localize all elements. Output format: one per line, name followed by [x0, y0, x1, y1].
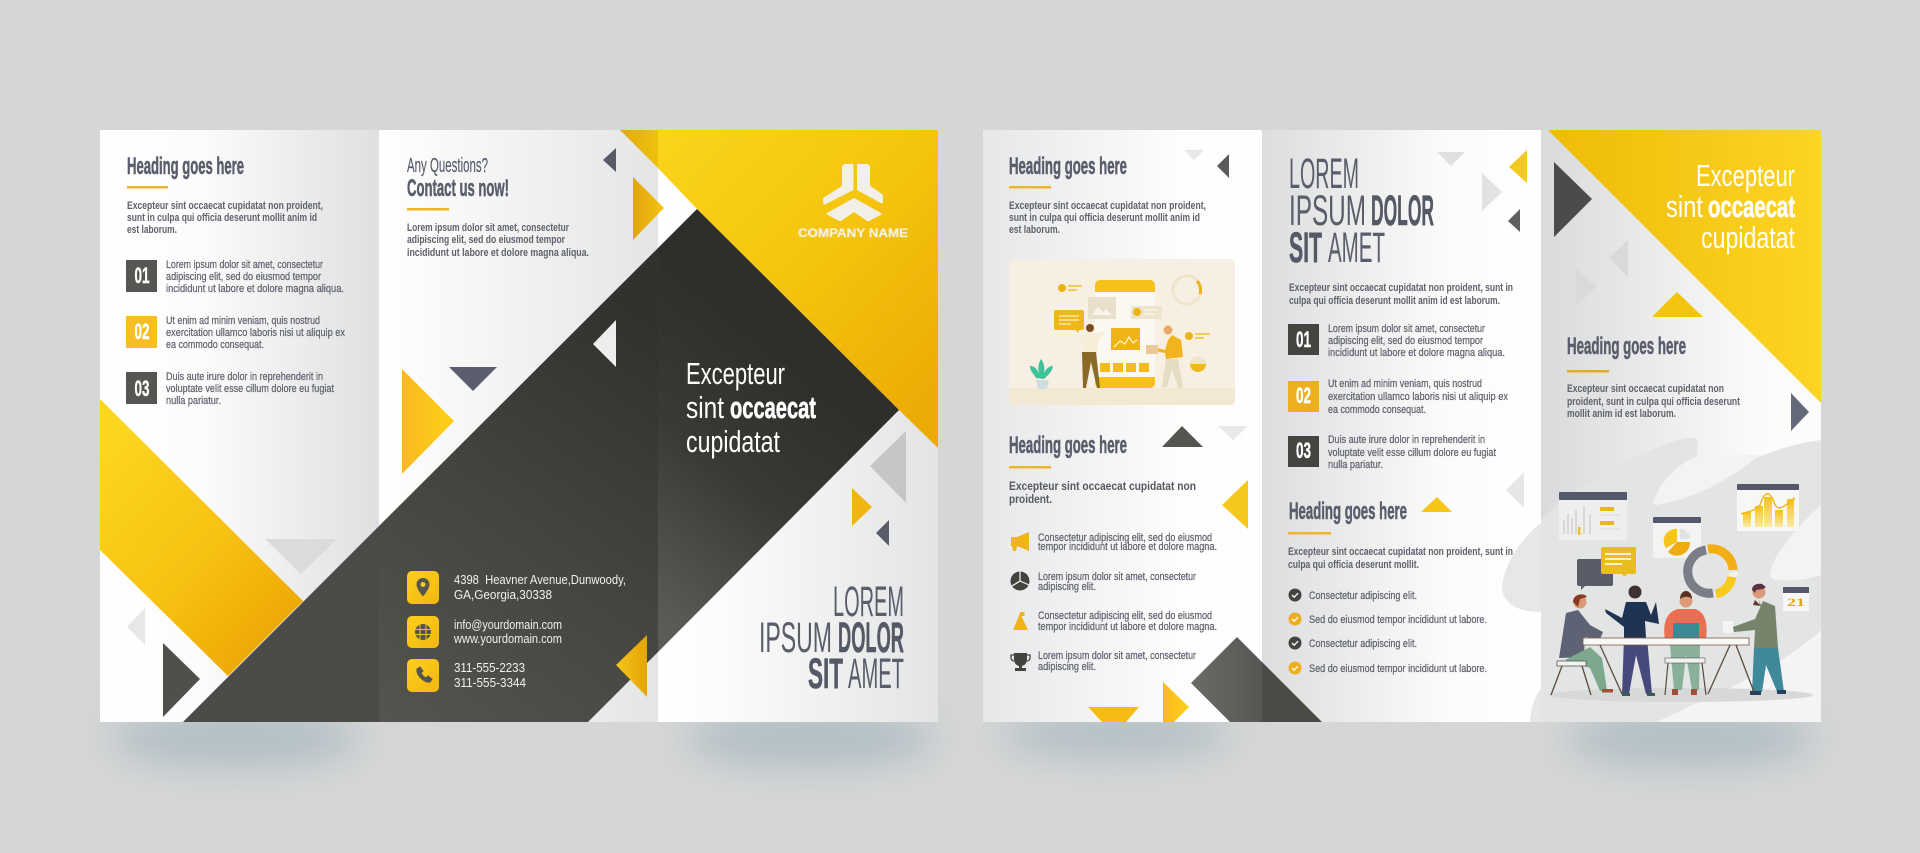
contact heading — [407, 155, 509, 202]
phone row — [407, 659, 526, 692]
triangle dark left — [1217, 154, 1229, 178]
triangle dark right — [1554, 162, 1592, 237]
triangle dark left — [1508, 209, 1520, 232]
list item 03: 03 — [134, 376, 150, 401]
triangle yellow lower — [616, 635, 647, 697]
table — [1583, 638, 1754, 694]
tagline: cupidatat — [1701, 220, 1795, 255]
triangle yellow left — [1509, 150, 1527, 183]
phone row: 311-555-2233 — [454, 661, 525, 675]
icon row: trophy: Lorem ipsum dolor sit amet, consectetur — [1038, 650, 1196, 662]
heading rule — [1567, 370, 1609, 372]
donut chart — [1688, 549, 1733, 594]
list item 01 — [1288, 323, 1505, 359]
icon row: pie chart: Lorem ipsum dolor sit amet, consectetur — [1038, 571, 1196, 583]
list item 01: adipiscing elit, sed do eiusmod tempor — [1328, 335, 1483, 347]
list item 03: voluptate velit esse cillum dolore eu fugiat — [166, 383, 334, 395]
triangle light down — [1218, 426, 1248, 440]
address row: 4398 Heavner Avenue,Dunwoody, — [454, 573, 626, 587]
check list: Consectetur adipiscing elit. — [1309, 590, 1417, 602]
web row — [407, 616, 562, 648]
brochure mockup spread — [100, 130, 1821, 780]
check list — [1288, 588, 1487, 675]
list item 03: voluptate velit esse cillum dolore eu fugiat — [1328, 447, 1496, 459]
heading 2: Heading goes here — [1009, 432, 1127, 459]
paragraph: Excepteur sint occaecat cupidatat non proident, sunt in — [1288, 546, 1513, 558]
company name: COMPANY NAME — [798, 226, 908, 240]
icon row: megaphone: tempor incididunt ut labore et dolore magna. — [1038, 541, 1217, 553]
triangle light left — [1506, 472, 1524, 508]
triangle yellow down — [1088, 707, 1139, 722]
cover tagline: occaecat — [730, 390, 816, 425]
intro paragraph — [127, 200, 323, 236]
intro paragraph: est laborum. — [127, 224, 177, 236]
address row — [407, 571, 626, 604]
heading: Heading goes here — [1289, 498, 1407, 525]
brochure shadows — [110, 708, 1815, 768]
triangle yellow — [852, 488, 872, 526]
list item 02: 02 — [134, 319, 150, 344]
light triangle left — [127, 608, 145, 645]
cover tagline: Excepteur — [686, 356, 785, 391]
paragraph: sunt in culpa qui officia deserunt mollit anim id — [1009, 212, 1200, 224]
icon row: pie chart — [1010, 571, 1196, 593]
grey triangle down — [265, 539, 337, 574]
contact paragraph: adipiscing elit, sed do eiusmod tempor — [407, 234, 566, 246]
heading rule — [127, 186, 168, 188]
list item 03: 03 — [1296, 438, 1311, 463]
triangle slate down — [449, 367, 497, 391]
contact heading: Any Questions? — [407, 155, 488, 177]
panel: contact fold — [379, 130, 664, 722]
triangle dark up — [1162, 426, 1203, 447]
phone row: 311-555-3344 — [454, 676, 526, 690]
web row: info@yourdomain.com — [454, 618, 562, 632]
dark diagonal shape — [379, 248, 658, 722]
triangle yellow up — [1652, 292, 1703, 317]
list item 01: adipiscing elit, sed do eiusmod tempor — [166, 271, 321, 283]
contact paragraph — [407, 222, 589, 259]
triangle slate right — [1791, 393, 1809, 431]
paragraph: mollit anim id est laborum. — [1567, 408, 1676, 420]
check list: Consectetur adipiscing elit. — [1309, 638, 1417, 650]
paragraph: Excepteur sint occaecat cupidatat non proident, sunt in — [1289, 282, 1513, 294]
yellow corner — [1548, 130, 1821, 403]
dark diagonal part — [183, 526, 379, 722]
list item 02: Ut enim ad minim veniam, quis nostrud — [1328, 378, 1482, 390]
panel: front cover: LOREM — [833, 578, 904, 626]
dark triangle right — [163, 643, 200, 717]
tagline — [1666, 158, 1795, 255]
list item 03: nulla pariatur. — [1328, 459, 1383, 471]
calendar — [1783, 587, 1809, 611]
list item 03 — [1288, 434, 1496, 471]
triangle light down — [1437, 152, 1465, 166]
logo — [823, 164, 883, 221]
triangle slate left — [603, 148, 616, 172]
heading: Heading goes here — [127, 153, 244, 180]
icon row: goal flag: tempor incididunt ut labore et dolore magna. — [1038, 621, 1217, 633]
paragraph — [1289, 282, 1513, 307]
illustration: mobile app team — [1009, 259, 1235, 405]
intro paragraph: sunt in culpa qui officia deserunt mollit anim id — [127, 212, 317, 224]
check list: Sed do eiusmod tempor incididunt ut labore. — [1309, 614, 1487, 626]
icon row: megaphone: Consectetur adipiscing elit, sed do eiusmod — [1038, 532, 1212, 544]
panel: front cover: AMET — [848, 650, 904, 698]
triangle light left — [1609, 240, 1628, 277]
person standing back — [1605, 586, 1659, 696]
paragraph: culpa qui officia deserunt mollit. — [1288, 559, 1419, 571]
contact heading: Contact us now! — [407, 175, 509, 202]
calendar: 21 — [1787, 595, 1805, 609]
paragraph: Excepteur sint occaecat cupidatat non — [1567, 383, 1724, 395]
triangle light right — [1576, 268, 1596, 305]
heading: Heading goes here — [1009, 153, 1127, 180]
triangle light down — [1184, 150, 1204, 160]
grey blob edge — [1502, 523, 1541, 722]
contact paragraph: incididunt ut labore et dolore magna aliqua. — [407, 247, 589, 259]
intro paragraph: Excepteur sint occaecat cupidatat non proident, — [127, 200, 323, 212]
person seated middle — [1664, 591, 1707, 695]
cover title: SIT — [808, 650, 843, 698]
list item 01: incididunt ut labore et dolore magna aliqua. — [166, 283, 344, 295]
cover title — [759, 578, 904, 698]
triangle yellow left — [1222, 480, 1248, 529]
check list: Sed do eiusmod tempor incididunt ut labore. — [1309, 663, 1487, 675]
list item 03: Duis aute irure dolor in reprehenderit in — [166, 371, 323, 383]
panel: left back fold — [100, 130, 379, 722]
brochure: outside spread — [100, 130, 938, 722]
title: LOREM — [1289, 150, 1359, 198]
list item 02: ea commodo consequat. — [1328, 404, 1426, 416]
triangle yellow (over fold) — [658, 202, 664, 214]
triangle grey — [870, 431, 906, 503]
list item 01: 01 — [1296, 327, 1311, 352]
icon row: goal flag: Consectetur adipiscing elit, sed do eiusmod — [1038, 610, 1212, 622]
grey diamond — [1191, 637, 1262, 722]
heading rule — [1009, 186, 1051, 188]
tagline: occaecat — [1708, 189, 1795, 224]
triangle yellow right — [1163, 682, 1189, 722]
panel: inside middle — [1262, 130, 1541, 722]
list item 02: exercitation ullamco laboris nisi ut aliquip ex — [1328, 391, 1508, 403]
icon row: trophy — [1011, 650, 1196, 673]
tagline: sint — [1666, 189, 1703, 224]
panel: inside right — [1541, 130, 1821, 722]
paragraph — [1567, 383, 1740, 420]
illustration: team meeting — [1551, 484, 1809, 696]
title: SIT — [1289, 224, 1322, 272]
paragraph 2: proident. — [1009, 492, 1052, 506]
triangle yellow right — [633, 177, 664, 240]
yellow corner — [620, 130, 658, 168]
background blob — [1541, 438, 1821, 722]
dark diamond — [658, 209, 899, 652]
heading rule — [1009, 466, 1051, 468]
list item 02: 02 — [1296, 383, 1311, 408]
chat bubble grey — [1577, 559, 1613, 590]
list item 01: Lorem ipsum dolor sit amet, consectetur — [166, 259, 323, 271]
yellow corner shape — [658, 130, 938, 448]
heading rule — [1288, 532, 1331, 534]
yellow diagonal band — [100, 399, 303, 676]
panel: front cover — [658, 130, 938, 722]
panel: front cover: DOLOR — [838, 614, 904, 662]
web row: www.yourdomain.com — [453, 632, 562, 646]
dark diamond right part — [1262, 662, 1322, 722]
address row: GA,Georgia,30338 — [454, 588, 552, 602]
paragraph 2 — [1009, 479, 1196, 506]
title: AMET — [1328, 224, 1385, 272]
list item 02: ea commodo consequat. — [166, 339, 264, 351]
paragraph 2: Excepteur sint occaecat cupidatat non — [1009, 479, 1196, 493]
pie chart card — [1653, 517, 1701, 558]
list item 01: 01 — [134, 263, 150, 288]
bar chart card — [1559, 492, 1627, 540]
list item 01: incididunt ut labore et dolore magna aliqua. — [1328, 347, 1505, 359]
list item 03 — [126, 371, 334, 407]
triangle yellow up — [1421, 497, 1452, 512]
paragraph: proident, sunt in culpa qui officia deserunt — [1567, 396, 1740, 408]
paragraph: est laborum. — [1009, 224, 1060, 236]
list item 02: Ut enim ad minim veniam, quis nostrud — [166, 315, 320, 327]
panel: inside middle: DOLOR — [1371, 187, 1434, 235]
tagline: Excepteur — [1696, 158, 1795, 193]
chat bubble yellow — [1601, 547, 1636, 577]
icon row: goal flag — [1013, 610, 1217, 633]
paragraph: culpa qui officia deserunt mollit anim id est laborum. — [1289, 295, 1500, 307]
triangle yellow large — [402, 369, 454, 474]
paragraph — [1288, 546, 1513, 571]
list item 01 — [126, 259, 344, 295]
line chart card — [1737, 484, 1799, 531]
triangle slate — [876, 520, 889, 546]
heading rule — [407, 208, 449, 210]
list item 03: nulla pariatur. — [166, 395, 221, 407]
person seated left — [1551, 594, 1613, 695]
heading: Heading goes here — [1567, 333, 1686, 360]
brochure: inside spread — [983, 130, 1821, 722]
list item 03: Duis aute irure dolor in reprehenderit in — [1328, 434, 1485, 446]
paragraph: Excepteur sint occaecat cupidatat non proident, — [1009, 200, 1206, 212]
list item 02: exercitation ullamco laboris nisi ut aliquip ex — [166, 327, 345, 339]
icon row: trophy: adipiscing elit. — [1038, 661, 1096, 673]
cover title: IPSUM — [759, 614, 832, 662]
triangle white in dark — [593, 320, 616, 367]
title: IPSUM — [1289, 187, 1366, 235]
icon row: pie chart: adipiscing elit. — [1038, 581, 1096, 593]
contact paragraph: Lorem ipsum dolor sit amet, consectetur — [407, 222, 570, 234]
panel: inside left — [983, 130, 1262, 722]
cover tagline — [686, 356, 816, 459]
triangle light right — [1482, 173, 1502, 211]
person standing right — [1723, 584, 1786, 695]
paragraph — [1009, 200, 1206, 236]
title — [1289, 150, 1434, 272]
cover tagline: cupidatat — [686, 424, 780, 459]
cover tagline: sint — [686, 390, 724, 425]
list item 02 — [126, 315, 345, 351]
icon row: megaphone — [1011, 532, 1217, 553]
list item 02 — [1288, 378, 1508, 416]
list item 01: Lorem ipsum dolor sit amet, consectetur — [1328, 323, 1485, 335]
